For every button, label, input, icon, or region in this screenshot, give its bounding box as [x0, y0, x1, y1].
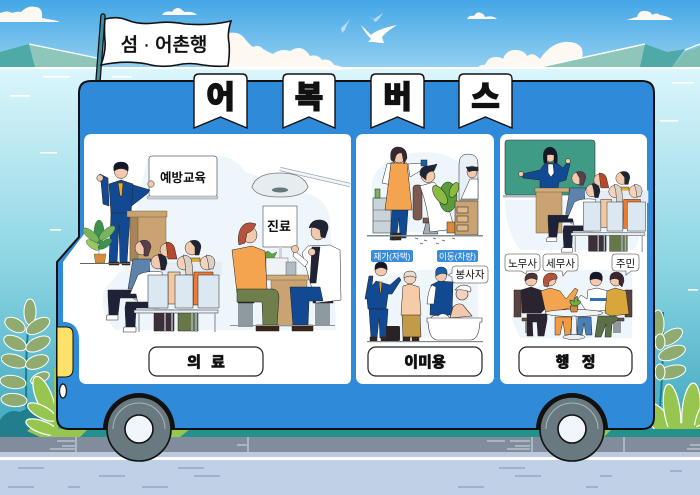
- flag pole: [98, 16, 103, 81]
- lecturer: [518, 147, 570, 188]
- seagull: far left: [341, 19, 350, 33]
- lectern: [535, 188, 569, 233]
- speech bubble: 주민: [612, 254, 639, 275]
- consultation desk: [262, 251, 309, 326]
- surgical lamp: [252, 169, 350, 197]
- dresser: [455, 201, 478, 235]
- speech bubble: 봉사자: [448, 266, 488, 283]
- seagull: main: [361, 25, 397, 43]
- round table: [545, 296, 603, 340]
- front wheel: [107, 397, 171, 461]
- left fern plant: [0, 299, 53, 431]
- podium: [127, 211, 167, 261]
- tag label: 이동(차량): [439, 252, 476, 262]
- floor line: [80, 263, 130, 264]
- presenter: [97, 162, 154, 265]
- diagnosis sign: [263, 206, 297, 275]
- rear wheel: [540, 397, 604, 461]
- horizon line: [0, 67, 700, 69]
- title banner: 복: [283, 74, 335, 128]
- audience: [106, 240, 222, 332]
- panel: 의료: [63, 134, 351, 384]
- banner letter: 버: [383, 80, 412, 115]
- sea: [0, 68, 700, 433]
- elder floor line: [367, 341, 483, 342]
- wheel arches: [103, 393, 608, 429]
- panel: 이미용: [356, 134, 494, 384]
- hair salon scene: [373, 147, 478, 240]
- cloud: top right: [627, 11, 673, 20]
- bubble label: 노무사: [508, 258, 537, 270]
- tag: 이동(차량): [437, 250, 478, 262]
- button label: 의 료: [187, 354, 225, 371]
- patient: [232, 223, 279, 331]
- cloud: top centre small: [162, 8, 197, 15]
- panel background: [356, 134, 494, 384]
- seagulls: [341, 13, 397, 43]
- banner letter: 어: [206, 80, 235, 115]
- lawyer figure: [521, 287, 547, 313]
- class audience: [546, 171, 648, 252]
- category button: [149, 347, 263, 376]
- speech bubble: 세무사: [543, 254, 578, 276]
- banner letter: 스: [471, 80, 500, 115]
- title banner: 어: [194, 74, 247, 128]
- left bush: [0, 368, 60, 438]
- button label: 행 정: [556, 354, 595, 371]
- pale backdrop: [102, 156, 336, 330]
- seagull: far right: [368, 13, 383, 22]
- cloud: top left small: [0, 7, 59, 22]
- salon floor line: [367, 235, 483, 236]
- title banner: 버: [371, 74, 424, 128]
- care worker in suit: [365, 262, 401, 341]
- pale backdrop: [505, 200, 640, 338]
- road: [0, 437, 700, 495]
- mountain: left: [0, 44, 97, 67]
- category button: [368, 347, 482, 376]
- bubble label: 세무사: [546, 258, 575, 270]
- chalkboard: [503, 140, 595, 198]
- cloud: top centre right: [467, 12, 497, 19]
- bus: [57, 74, 654, 461]
- board label: 예방교육: [160, 171, 206, 185]
- category button: [519, 347, 632, 376]
- mountain: right: [540, 44, 700, 67]
- volunteer: [427, 267, 453, 315]
- office chairs: [514, 290, 632, 317]
- mirror: [459, 154, 478, 200]
- button label: 이미용: [404, 354, 446, 371]
- meeting scene: [514, 272, 632, 340]
- salon chair: [413, 185, 443, 234]
- sign label: 진료: [267, 219, 291, 234]
- customer: [420, 164, 454, 232]
- bubble label: 주민: [616, 258, 635, 270]
- salon plant: [430, 181, 461, 233]
- cloud: behind flag: [228, 33, 346, 70]
- bathtub: [427, 285, 482, 340]
- flag text: 섬 · 어촌행: [121, 34, 207, 56]
- drawer cart: [373, 198, 391, 233]
- flag cloth: [101, 18, 231, 66]
- resident in white sweater: [578, 288, 610, 312]
- title banner: 스: [459, 74, 512, 128]
- doctor: [290, 220, 341, 331]
- banner letter: 복: [295, 80, 323, 115]
- background clouds: [0, 7, 673, 70]
- tag: 재가(자택): [371, 250, 413, 262]
- panel background: [500, 134, 647, 384]
- elderly woman: [401, 271, 421, 341]
- bag: [386, 326, 400, 341]
- resident in mustard top: [605, 288, 629, 316]
- ground foliage under bus: [40, 429, 612, 437]
- bubble label: 봉사자: [456, 269, 485, 281]
- tag label: 재가(자택): [374, 252, 411, 262]
- panel background: [63, 134, 351, 384]
- sky: [0, 0, 700, 68]
- clinic floor line: [230, 325, 335, 326]
- right fern plant: [652, 310, 687, 430]
- flag: [98, 16, 231, 81]
- hair clippings: [415, 238, 455, 244]
- presentation board: [147, 156, 218, 199]
- tax accountant figure: [541, 288, 578, 314]
- bus body: [57, 81, 654, 429]
- pale backdrop: [372, 152, 478, 338]
- cloud: right of centre: [477, 42, 583, 68]
- speech bubble: 노무사: [505, 254, 540, 274]
- hairdresser: [382, 147, 427, 240]
- ground strip: [57, 429, 700, 437]
- potted plant: [81, 220, 117, 263]
- side lamp: [60, 384, 66, 398]
- bus headlight: [57, 327, 73, 377]
- sea ripples: [10, 76, 698, 291]
- right bush: [642, 382, 700, 443]
- panel: 행정: [500, 134, 648, 384]
